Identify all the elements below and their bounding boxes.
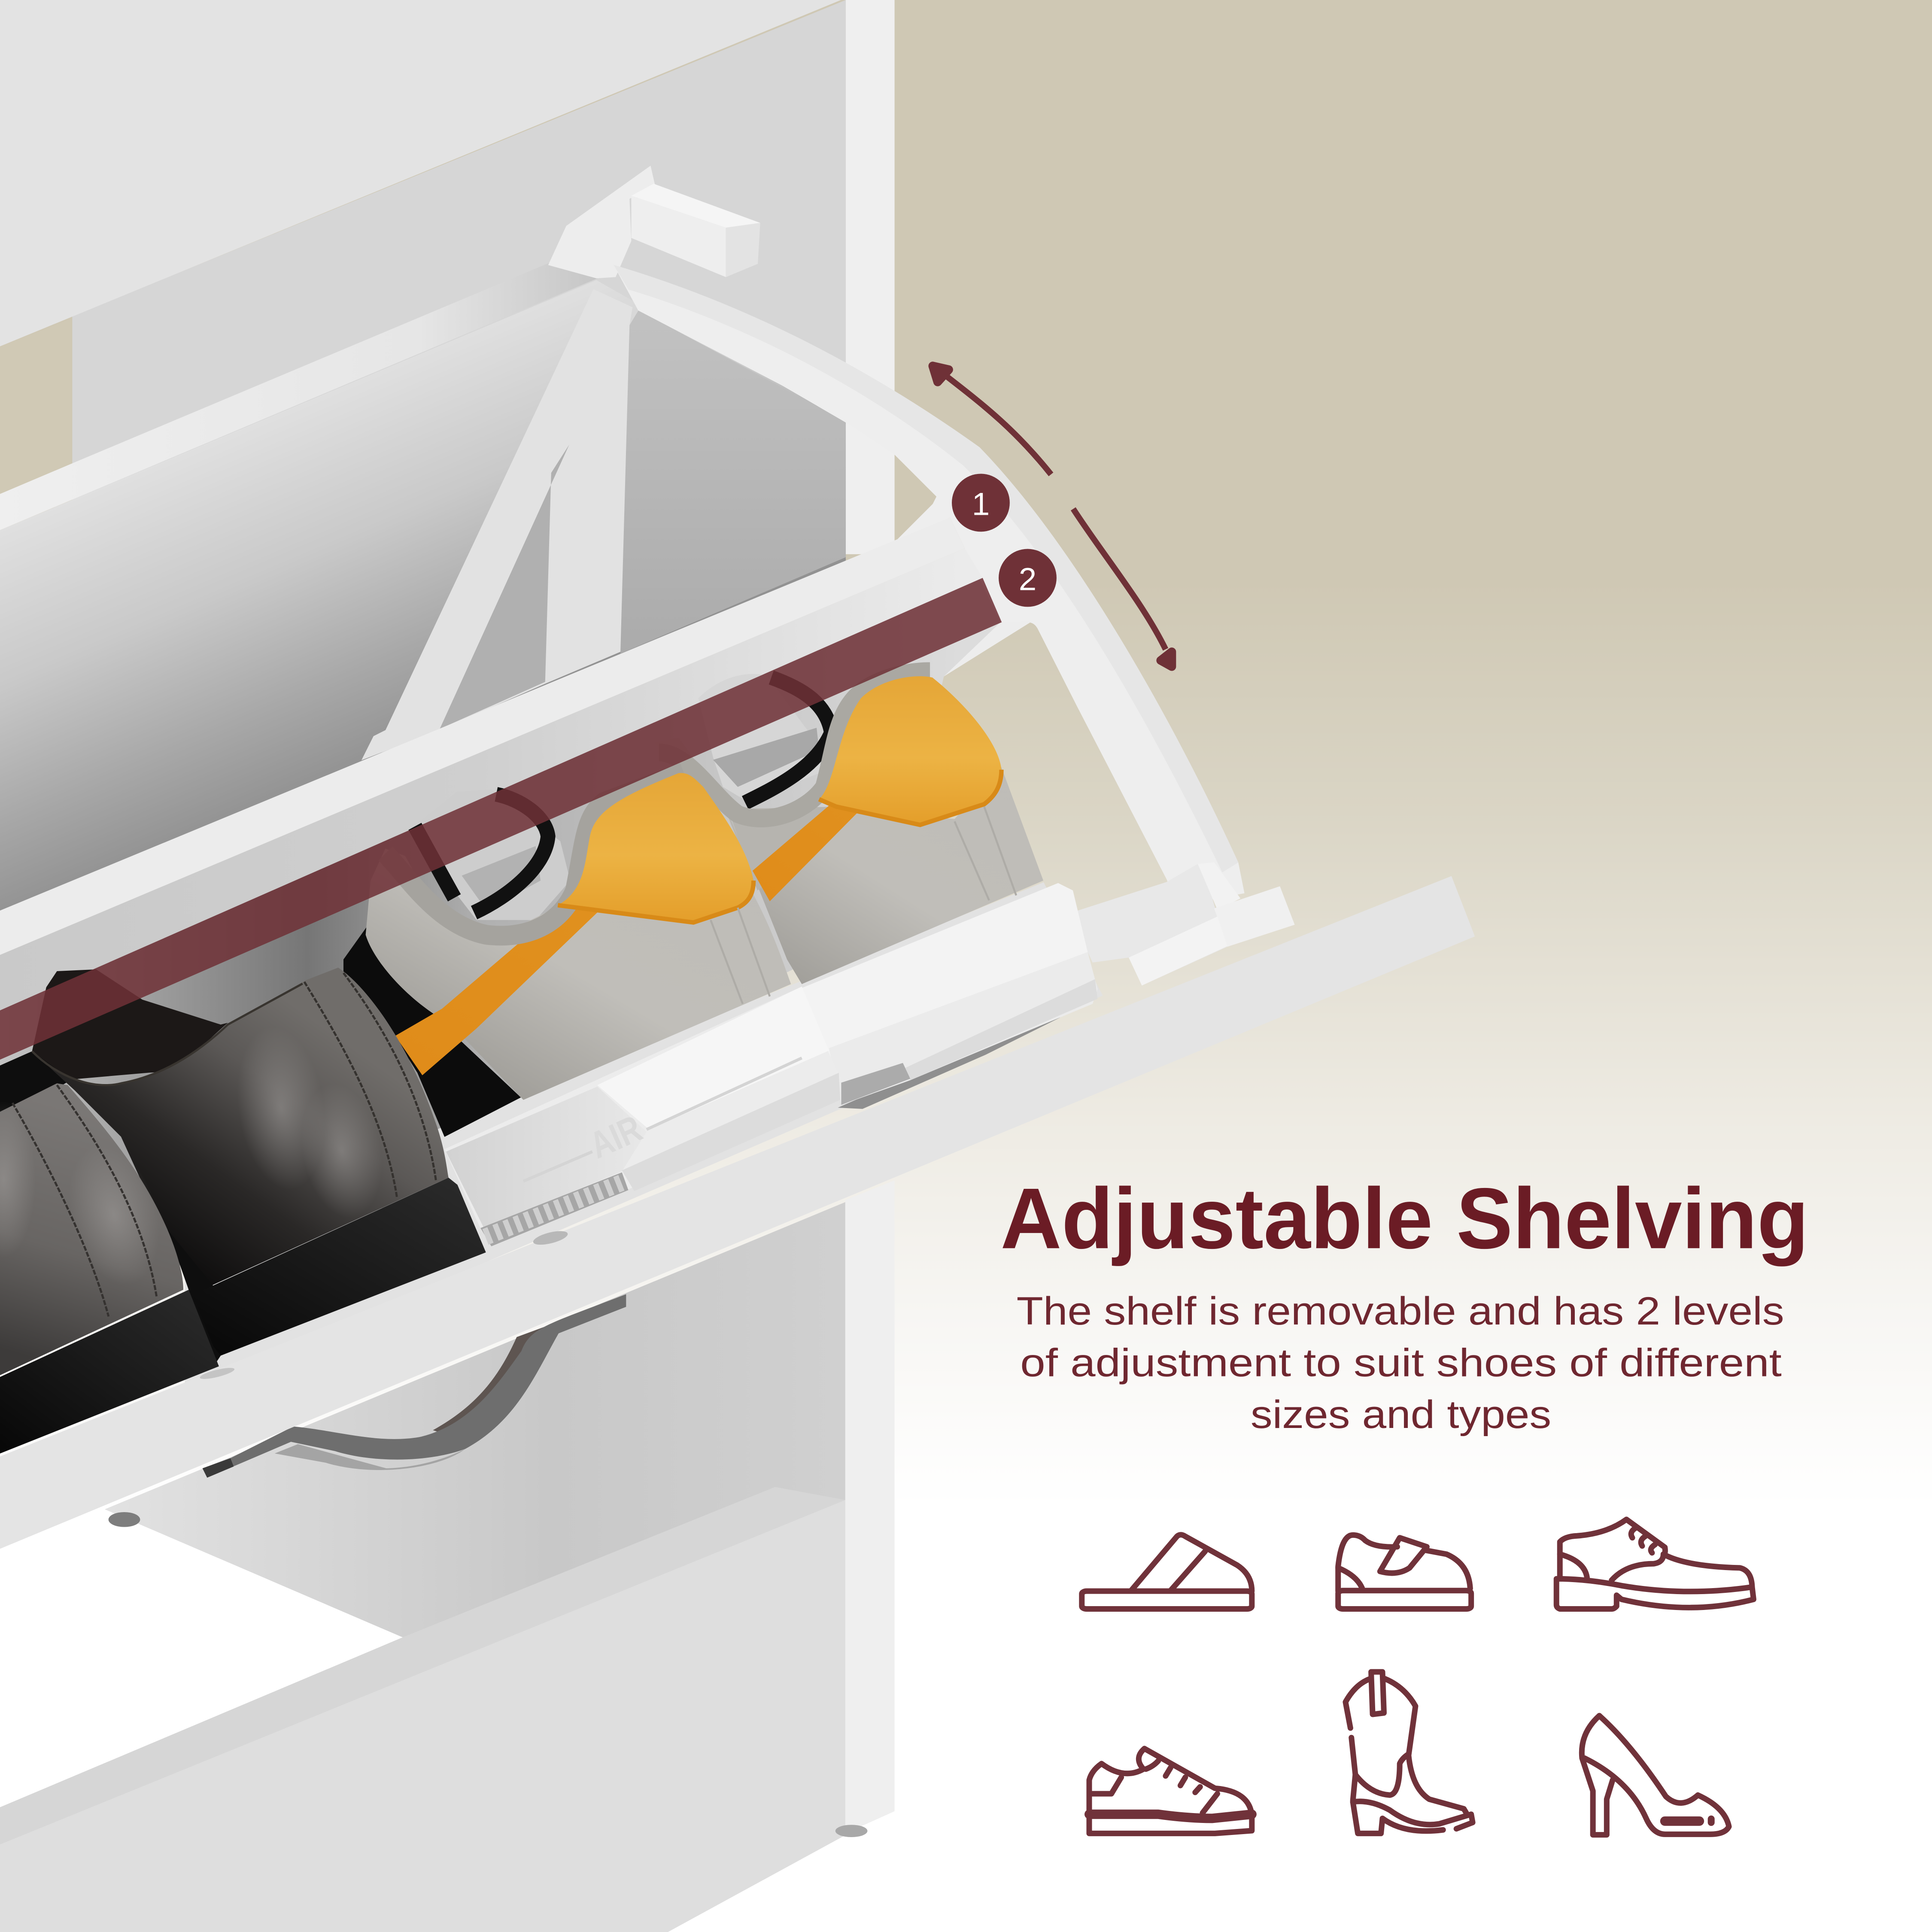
back sneaker [654,671,1097,1105]
bracket head [548,166,656,278]
handle dark end [203,1458,234,1478]
level marker 2: 2 [1019,561,1036,597]
flip-down shelf panel [0,876,1475,1549]
arrow: upward [933,366,1051,474]
description: The shelf is removable and has 2 levels [1017,1289,1784,1333]
level marker 2 [999,549,1057,607]
mounting block [631,184,760,277]
icon: high heel [1582,1716,1729,1835]
right side column lower [845,1180,895,1833]
cabinet upper section [0,0,895,940]
translucent level band [0,578,1002,1060]
handle strap shadow [275,1444,465,1470]
level marker 1: 1 [972,486,990,522]
lower interior panel [105,1202,845,1637]
upper shelf strip [0,263,598,530]
beige gap [0,319,71,494]
AIR embossed lettering: AIR [583,1107,648,1166]
side column [846,0,895,554]
icon: sneaker [1089,1749,1252,1833]
icon: oxford shoe [1556,1519,1753,1609]
grey gap between legs [440,444,569,729]
middle flap band [0,517,965,955]
handle inner [433,1326,547,1435]
back panel [72,0,846,602]
icon: slide sandal [1082,1535,1252,1609]
front oxford [0,1083,235,1454]
bottom drawer top strip [0,1487,845,1849]
cabinet foot right [835,1825,867,1837]
bracket: curved adjustment arm [614,265,1245,905]
bracket legs [361,289,632,760]
shelf crease shadow [838,993,1097,1109]
handle strap [203,1294,626,1478]
sneakers [343,671,1097,1248]
shelf top surface [185,882,1103,1392]
arrow: downward [1073,509,1172,667]
shelf interior shade behind shoes [0,548,1000,1355]
bottom drawer face [0,1500,845,1932]
icon: cowboy boot [1346,1672,1473,1833]
top drawer face [0,0,841,346]
description [1017,1289,1784,1437]
interior shadowed panel [0,280,846,940]
icon: strap shoe [1338,1535,1471,1609]
bracket foot [1069,862,1295,985]
description: of adjustment to suit shoes of different [1020,1341,1782,1385]
description: sizes and types [1251,1393,1551,1437]
title: Adjustable Shelving [1000,1170,1809,1267]
level marker 1 [952,474,1010,532]
front sneaker [343,772,840,1248]
grey window in bracket [620,310,846,653]
oxford shoes [0,968,486,1454]
light wedge above level band [0,548,983,1010]
back oxford [0,968,486,1366]
lower cabinet [0,1202,845,1932]
cabinet foot left [109,1512,140,1527]
